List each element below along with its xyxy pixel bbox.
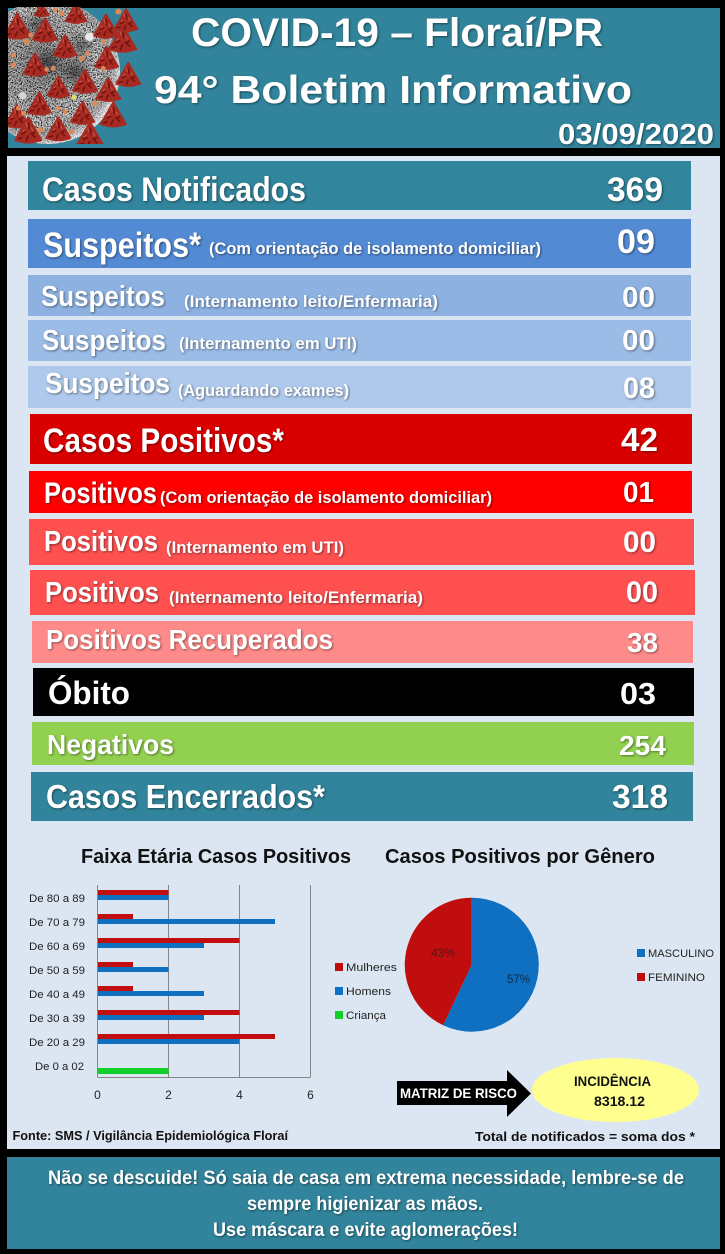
- main panel background: [7, 156, 720, 1149]
- panel: suspeitos isolamento domiciliar: [28, 219, 691, 268]
- panel: suspeitos aguardando exames: [28, 366, 691, 408]
- panel: positivos leito enfermaria: [30, 570, 695, 615]
- panel: suspeitos aguardando exames: (Aguardando exames): [178, 381, 349, 400]
- panel: casos notificados: Casos Notificados: [42, 171, 306, 209]
- callout: incidencia: [532, 1058, 699, 1122]
- arrow: matriz de risco: [397, 1070, 531, 1117]
- heading: faixa etaria: Faixa Etária Casos Positivos: [81, 846, 351, 868]
- title: 94° Boletim Informativo: [154, 69, 632, 112]
- panel: positivos leito enfermaria: (Internamento leito/Enfermaria): [169, 588, 423, 607]
- panel: positivos isolamento domiciliar: (Com orientação de isolamento domiciliar): [160, 488, 492, 507]
- panel: negativos: 254: [619, 730, 666, 761]
- panel: positivos isolamento domiciliar: Positivos: [44, 477, 157, 510]
- bar chart: faixa etaria: De 30 a 39: [29, 1013, 85, 1025]
- bar chart: faixa etaria: 6: [307, 1088, 314, 1102]
- bar chart: faixa etaria: De 80 a 89: [29, 893, 85, 905]
- legend: bar chart: Criança: [346, 1010, 387, 1022]
- panel: suspeitos aguardando exames: 08: [623, 372, 655, 405]
- panel: positivos UTI: (Internamento em UTI): [166, 538, 344, 557]
- panel: suspeitos leito enfermaria: Suspeitos: [41, 281, 165, 313]
- panel: positivos UTI: 00: [623, 526, 656, 559]
- panel: suspeitos isolamento domiciliar: Suspeitos*: [43, 226, 201, 265]
- date: 03/09/2020: [558, 119, 714, 151]
- icon: coronavirus illustration: [8, 7, 142, 144]
- title: COVID-19 – Floraí/PR: [191, 11, 603, 55]
- panel: casos encerrados: Casos Encerrados*: [46, 778, 325, 815]
- panel: casos encerrados: [31, 772, 693, 821]
- panel: suspeitos UTI: Suspeitos: [42, 325, 166, 357]
- legend: pie chart: MASCULINO: [648, 948, 714, 960]
- footer banner: [7, 1157, 720, 1249]
- panel: casos positivos: Casos Positivos*: [43, 422, 285, 460]
- legend: bar chart: [335, 962, 398, 1022]
- panel: casos positivos: [30, 414, 692, 464]
- bar chart: faixa etaria: De 50 a 59: [29, 965, 85, 977]
- legend: pie chart: [637, 948, 714, 984]
- legend: bar chart: Homens: [346, 986, 392, 998]
- panel: suspeitos UTI: [28, 320, 691, 361]
- panel: casos notificados: [28, 161, 691, 210]
- panel: suspeitos leito enfermaria: 00: [622, 282, 655, 314]
- panel: suspeitos UTI: 00: [622, 325, 655, 357]
- panel: positivos leito enfermaria: Positivos: [45, 577, 159, 609]
- panel: suspeitos leito enfermaria: (Internamento leito/Enfermaria): [184, 292, 438, 311]
- source note: Fonte: SMS / Vigilância Epidemiológica Floraí: [12, 1128, 288, 1143]
- footer banner: Não se descuide! Só saia de casa em extrema necessidade, lembre-se de: [48, 1168, 684, 1189]
- bar chart: faixa etaria: De 40 a 49: [29, 989, 85, 1001]
- panel: suspeitos leito enfermaria: [28, 275, 691, 316]
- panel: positivos isolamento domiciliar: [29, 471, 692, 513]
- panel: positivos leito enfermaria: 00: [626, 576, 658, 609]
- panel: positivos recuperados: 38: [627, 627, 658, 658]
- heading: genero: Casos Positivos por Gênero: [385, 846, 655, 868]
- panel: casos positivos: 42: [621, 421, 658, 458]
- pie chart: genero: [405, 898, 539, 1032]
- panel: obito: Óbito: [48, 675, 130, 711]
- panel: suspeitos aguardando exames: Suspeitos: [45, 368, 170, 400]
- bar chart: faixa etaria: 4: [236, 1088, 243, 1102]
- callout: incidencia: INCIDÊNCIA: [574, 1072, 651, 1089]
- footer banner: Use máscara e evite aglomerações!: [213, 1220, 518, 1241]
- panel: negativos: [32, 722, 694, 765]
- panel: positivos recuperados: Positivos Recuperados: [46, 624, 333, 655]
- panel: obito: 03: [620, 676, 656, 711]
- panel: suspeitos UTI: (Internamento em UTI): [179, 334, 357, 353]
- panel: suspeitos isolamento domiciliar: (Com orientação de isolamento domiciliar): [209, 239, 541, 258]
- panel: casos notificados: 369: [607, 171, 663, 209]
- title: [154, 11, 632, 112]
- panel: negativos: Negativos: [47, 729, 174, 760]
- panel: suspeitos isolamento domiciliar: 09: [617, 223, 655, 261]
- pie chart: genero: 57%: [507, 974, 530, 986]
- bar chart: faixa etaria: 2: [165, 1088, 172, 1102]
- bar chart: faixa etaria: [29, 885, 314, 1102]
- panel: positivos UTI: [29, 519, 694, 565]
- panel: positivos UTI: Positivos: [44, 526, 158, 558]
- legend: bar chart: Mulheres: [346, 962, 398, 974]
- panel: positivos isolamento domiciliar: 01: [623, 477, 654, 509]
- legend: pie chart: FEMININO: [648, 972, 705, 984]
- bar chart: faixa etaria: 0: [94, 1088, 101, 1102]
- bar chart: faixa etaria: De 0 a 02: [35, 1061, 84, 1073]
- footer banner: sempre higienizar as mãos.: [247, 1194, 483, 1215]
- bar chart: faixa etaria: De 20 a 29: [29, 1037, 85, 1049]
- header banner: [0, 0, 720, 151]
- panel: obito: [33, 668, 694, 716]
- pie chart: genero: 43%: [431, 948, 455, 960]
- bar chart: faixa etaria: De 70 a 79: [29, 917, 85, 929]
- callout: incidencia: 8318.12: [594, 1093, 645, 1109]
- bar chart: faixa etaria: De 60 a 69: [29, 941, 85, 953]
- panel: positivos recuperados: [32, 621, 693, 663]
- arrow: matriz de risco: MATRIZ DE RISCO: [400, 1085, 517, 1101]
- total note: Total de notificados = soma dos *: [475, 1129, 696, 1144]
- panel: casos encerrados: 318: [612, 778, 668, 815]
